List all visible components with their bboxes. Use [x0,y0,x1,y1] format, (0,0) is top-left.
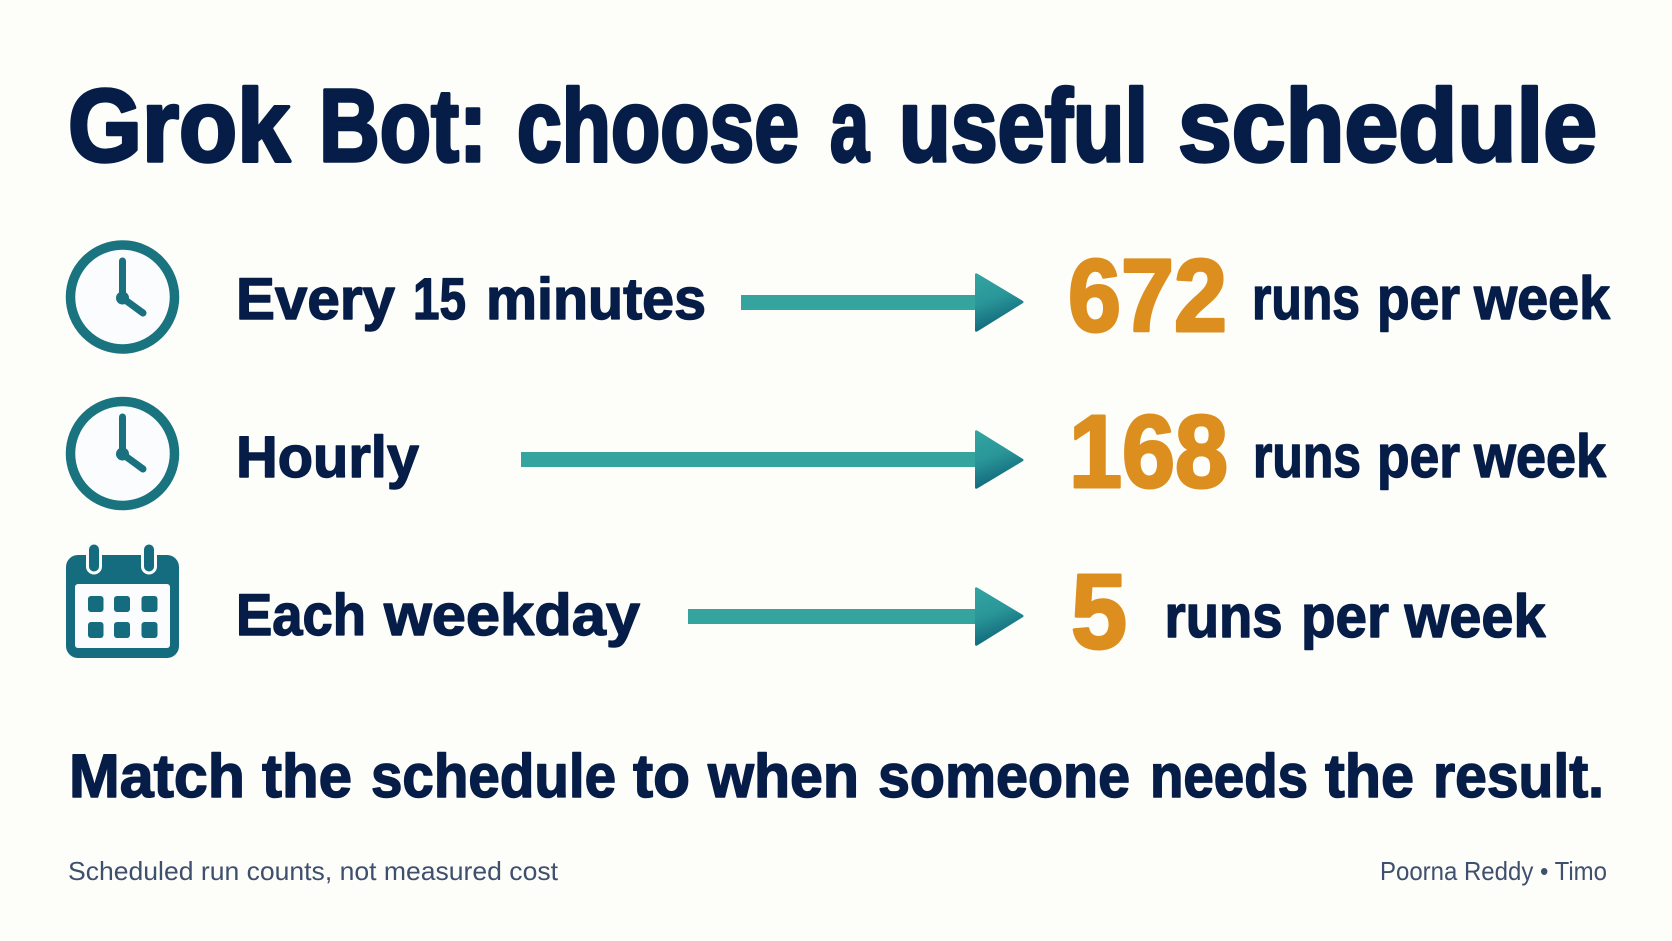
takeaway: the [1325,742,1414,810]
credit: Poorna Reddy • Timo [1380,856,1607,886]
takeaway: the [262,742,352,810]
unit: week [1404,583,1546,650]
label: Each [236,583,366,648]
title: Grok [68,68,291,183]
unit: week [1473,423,1607,490]
unit: per [1377,265,1460,332]
takeaway: someone [878,742,1130,810]
title: schedule [1178,68,1597,183]
row: hourly [70,394,1607,509]
unit: runs [1164,583,1282,650]
icon: clock [70,245,174,349]
takeaway: schedule [371,742,616,810]
arrow [688,587,1024,646]
takeaway: result. [1433,742,1604,810]
label: 15 [413,267,466,332]
icon: clock [70,402,174,506]
takeaway: to [633,742,690,810]
label: Every [236,267,395,332]
takeaway: needs [1150,742,1308,810]
unit: runs [1252,265,1360,332]
footer note: Scheduled run counts, not measured cost [68,856,559,886]
title: useful [899,68,1148,183]
unit: runs [1253,423,1361,490]
unit: per [1301,583,1389,650]
takeaway: Match [69,742,245,810]
row: each weekday [66,543,1546,671]
count: 168 [1069,394,1228,509]
label: weekday [383,583,640,648]
title: choose [517,68,799,183]
label: Hourly [236,425,419,490]
count: 5 [1071,553,1127,671]
title: Bot: [319,68,487,183]
arrow [741,273,1024,332]
label: minutes [486,267,706,332]
row: every 15 minutes [70,238,1611,353]
unit: per [1377,423,1460,490]
icon: calendar [66,543,179,658]
title: a [830,68,869,183]
count: 672 [1068,238,1227,353]
takeaway: when [707,742,859,810]
arrow [521,430,1024,489]
unit: week [1473,265,1611,332]
